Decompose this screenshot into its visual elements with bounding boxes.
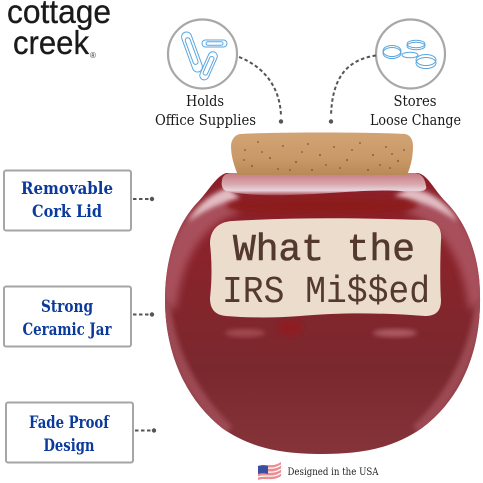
callout: strong ceramic jar: Ceramic Jar	[22, 320, 112, 340]
callout: strong ceramic jar: Strong	[41, 297, 93, 317]
logo: cottage creek: creek	[13, 24, 89, 61]
arrow: fade proof design	[135, 428, 156, 433]
cork lid	[231, 132, 413, 175]
caption: holds office supplies	[155, 94, 256, 129]
caption: stores loose change	[370, 94, 461, 129]
jar rim glaze	[222, 173, 426, 195]
arrow: paper clip connector	[239, 57, 283, 124]
caption: stores loose change: Loose Change	[370, 113, 461, 129]
callout: strong ceramic jar	[4, 286, 131, 346]
callout: removable cork lid: Cork Lid	[32, 202, 102, 222]
callout: fade proof design: Fade Proof	[29, 413, 110, 433]
caption: stores loose change: Stores	[394, 94, 436, 110]
jar edge sheen	[160, 190, 483, 436]
jar label plaque: What the	[233, 229, 415, 272]
icon: coins in circle	[376, 20, 445, 88]
jar label plaque: IRS Mi$$ed	[222, 271, 430, 314]
callout: removable cork lid	[4, 170, 131, 230]
arrow: strong ceramic jar	[133, 312, 154, 317]
jar label plaque	[210, 218, 441, 318]
caption: holds office supplies: Office Supplies	[155, 113, 256, 129]
arrow: removable cork lid	[133, 197, 154, 201]
callout: fade proof design	[6, 402, 133, 462]
logo: cottage creek: ®	[90, 51, 96, 60]
jar shoulder highlights	[188, 188, 458, 222]
caption: holds office supplies: Holds	[186, 94, 224, 110]
text: designed in the usa: Designed in the USA	[288, 467, 379, 478]
icon: american flag	[258, 462, 281, 480]
callout: removable cork lid: Removable	[21, 179, 113, 199]
icon: paper clips in circle	[168, 20, 237, 88]
callout: fade proof design: Design	[44, 436, 94, 456]
jar	[160, 173, 483, 454]
logo: cottage creek	[7, 0, 111, 61]
arrow: coin connector	[329, 56, 376, 124]
jar lower reflections	[225, 320, 417, 337]
